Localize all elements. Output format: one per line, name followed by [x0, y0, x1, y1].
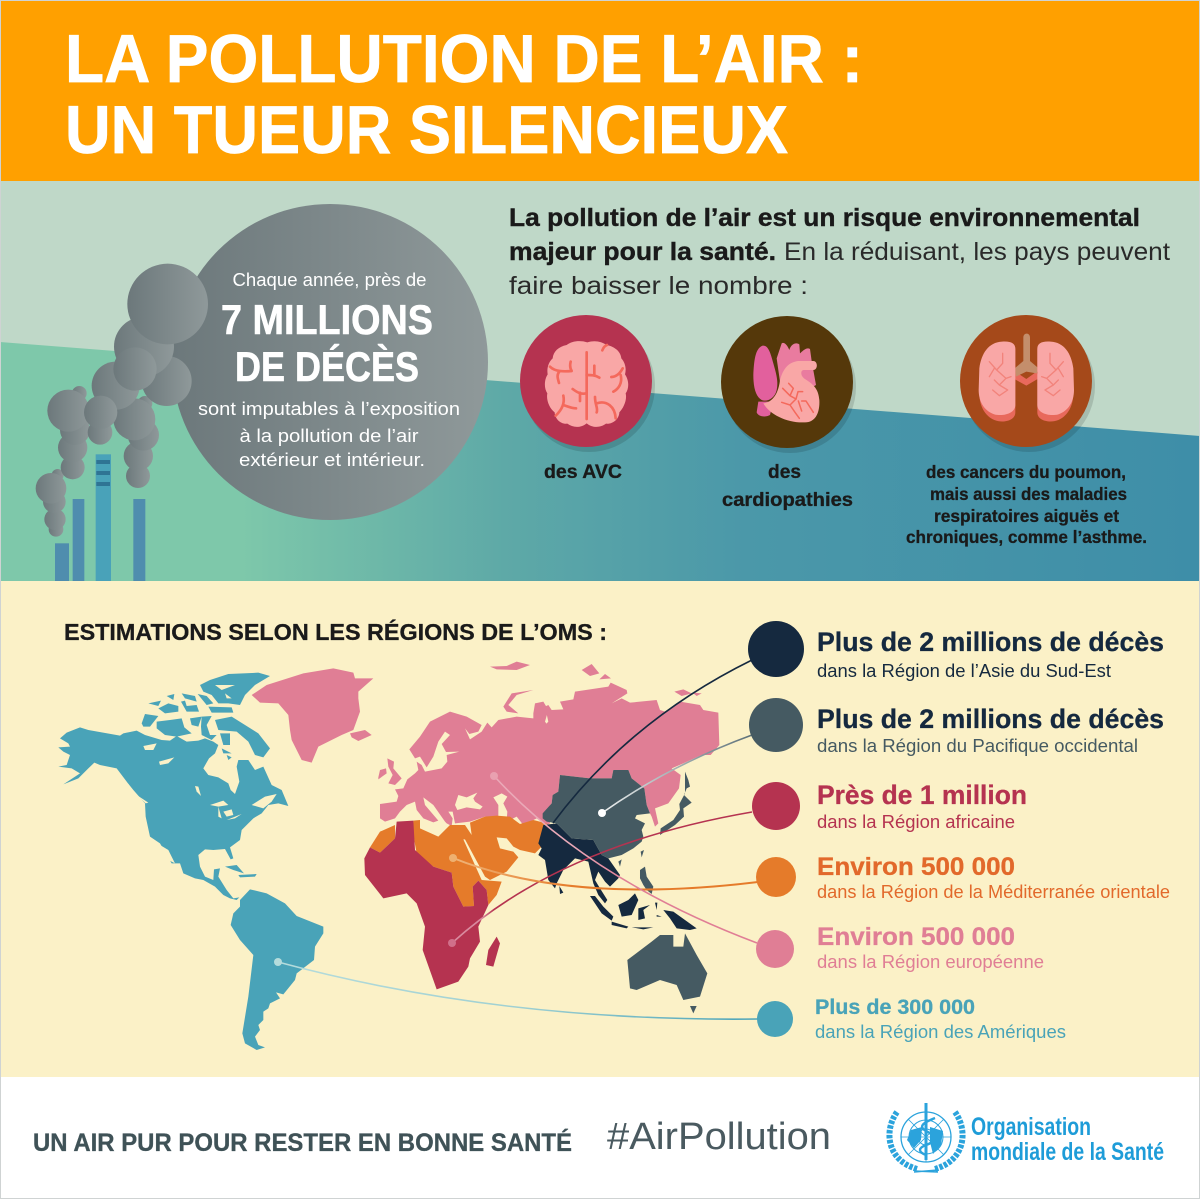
icon: brain: [520, 315, 655, 452]
map: Africa: [364, 821, 500, 989]
intro text: La pollution de l’air est un risque environnemental: [509, 204, 1140, 232]
map: South-East Asia: [538, 823, 697, 930]
legend: South-East Asia: [748, 621, 1164, 681]
legend: Europe: [756, 923, 1044, 972]
intro text: majeur pour la santé.: [509, 238, 776, 266]
legend: Americas: Plus de 300 000: [815, 996, 975, 1019]
intro text: En la réduisant, les pays peuvent: [784, 238, 1170, 266]
slogan: UN AIR PUR POUR RESTER EN BONNE SANTÉ: [33, 1128, 572, 1157]
big circle: 7 million deaths: 7 MILLIONS: [221, 296, 433, 343]
logo: WHO wordmark: Organisation: [971, 1113, 1091, 1141]
title: LA POLLUTION DE L’AIR :: [65, 21, 863, 97]
intro text: [509, 204, 1170, 300]
legend: Africa: dans la Région africaine: [817, 812, 1015, 832]
line: Eastern Mediterranean: [449, 854, 758, 890]
legend: Americas: [757, 996, 1066, 1042]
big circle: 7 million deaths: à la pollution de l’air: [240, 425, 418, 446]
legend: Eastern Mediterranean: Environ 500 000: [817, 853, 1015, 881]
heading: regional estimates: ESTIMATIONS SELON LES RÉGIONS DE L’OMS :: [64, 618, 607, 645]
label: heart disease: [722, 462, 853, 511]
smoke clouds: [36, 264, 208, 537]
line: Western Pacific: [598, 735, 752, 817]
map: Americas: [58, 673, 323, 1050]
big circle: 7 million deaths: DE DÉCÈS: [235, 343, 419, 390]
label: lung disease: [906, 462, 1147, 547]
world map: [58, 662, 719, 1050]
legend: Western Pacific: [749, 698, 1164, 756]
legend: South-East Asia: Plus de 2 millions de décès: [817, 627, 1164, 657]
legend: Europe: dans la Région européenne: [817, 952, 1044, 972]
map: Eastern Mediterranean: [370, 816, 547, 907]
line: Africa: [448, 812, 752, 947]
intro text: faire baisser le nombre :: [509, 272, 808, 300]
label: heart disease: des: [768, 462, 801, 483]
big circle: 7 million deaths: Chaque année, près de: [232, 269, 426, 290]
big circle: 7 million deaths: extérieur et intérieur.: [239, 449, 425, 470]
hashtag: #AirPollution: [607, 1116, 831, 1158]
title: UN TUEUR SILENCIEUX: [65, 92, 788, 168]
legend: [748, 621, 1170, 1042]
panel: regional estimates background: [0, 581, 1200, 1077]
label: lung disease: mais aussi des maladies: [930, 484, 1127, 504]
icon: heart: [721, 316, 856, 453]
connector lines and map dots: [274, 660, 758, 1019]
map: Western Pacific: [543, 770, 707, 1013]
legend: Africa: Près de 1 million: [817, 780, 1027, 810]
label: lung disease: respiratoires aiguës et: [934, 506, 1119, 526]
map: Europe, Russia and Greenland: [252, 662, 719, 827]
legend: South-East Asia: dans la Région de l’Asie du Sud-Est: [817, 661, 1111, 681]
icon labels: [544, 462, 1147, 547]
legend: Americas: dans la Région des Amériques: [815, 1022, 1066, 1042]
logo: WHO emblem: [889, 1103, 963, 1172]
title: [65, 21, 863, 168]
label: stroke: des AVC: [544, 462, 622, 483]
big circle: 7 million deaths: sont imputables à l’exposition: [198, 398, 460, 419]
logo: WHO wordmark: [971, 1113, 1164, 1166]
panel: factory chimneys and smoke: [36, 204, 488, 581]
legend: Eastern Mediterranean: [756, 853, 1170, 902]
label: heart disease: cardiopathies: [722, 490, 853, 511]
big circle: 7 million deaths: [172, 204, 488, 520]
panel: footer: [0, 1077, 1200, 1199]
legend: Africa: [752, 780, 1027, 832]
line: Americas: [274, 958, 758, 1019]
legend: Europe: Environ 500 000: [817, 923, 1015, 951]
legend: Eastern Mediterranean: dans la Région de la Méditerranée orientale: [817, 882, 1170, 902]
line: Europe: [490, 772, 757, 943]
icon: lungs: [960, 315, 1095, 452]
chimneys: [55, 454, 145, 581]
header banner: [0, 0, 1200, 181]
line: South-East Asia: [553, 660, 752, 823]
legend: Western Pacific: Plus de 2 millions de décès: [817, 704, 1164, 734]
label: lung disease: des cancers du poumon,: [926, 462, 1126, 482]
panel: health risk background: [0, 181, 1200, 581]
legend: Western Pacific: dans la Région du Pacifique occidental: [817, 736, 1138, 756]
label: lung disease: chroniques, comme l’asthme.: [906, 527, 1147, 547]
